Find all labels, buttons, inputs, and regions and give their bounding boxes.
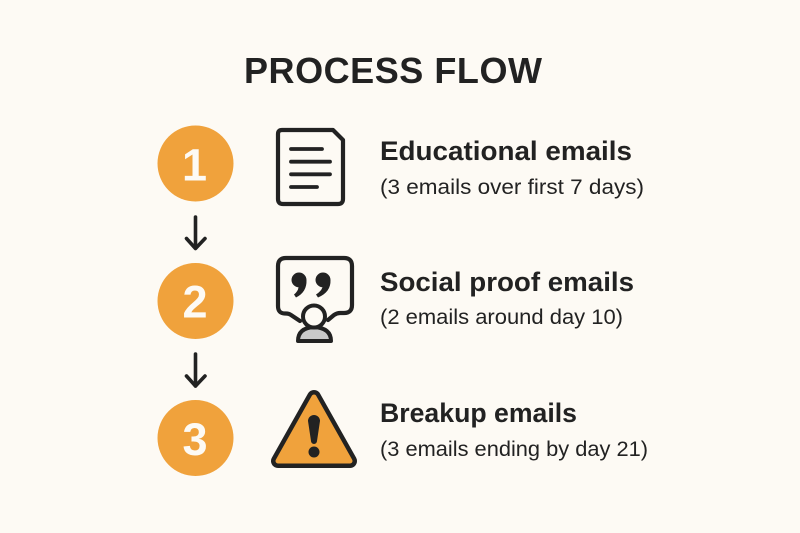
icon: quote speech bubble with person bbox=[278, 258, 352, 341]
step 1 text bbox=[380, 136, 644, 199]
step 2 number badge bbox=[158, 263, 234, 339]
icon: document bbox=[278, 130, 343, 204]
step 1 number badge bbox=[158, 126, 234, 202]
arrow: step 2 to step 3 bbox=[186, 354, 205, 386]
title: PROCESS FLOW bbox=[244, 50, 542, 91]
step 1 text: (3 emails over first 7 days) bbox=[380, 175, 644, 199]
arrow: step 1 to step 2 bbox=[186, 217, 205, 248]
step 2 text: Social proof emails bbox=[380, 267, 634, 297]
step 2 text: (2 emails around day 10) bbox=[380, 305, 623, 329]
quote mark right bbox=[316, 273, 331, 298]
step 3 number badge: 3 bbox=[182, 414, 208, 465]
step 3 text bbox=[380, 398, 648, 461]
step 2 number badge: 2 bbox=[182, 276, 208, 328]
step 3 text: Breakup emails bbox=[380, 398, 577, 428]
quote mark left bbox=[292, 273, 307, 298]
step 1 number badge: 1 bbox=[182, 140, 207, 190]
step 2 text bbox=[380, 267, 634, 329]
step 3 text: (3 emails ending by day 21) bbox=[380, 437, 648, 461]
step 1 text: Educational emails bbox=[380, 136, 632, 166]
icon: warning triangle bbox=[278, 397, 350, 461]
step 3 number badge bbox=[158, 400, 234, 476]
